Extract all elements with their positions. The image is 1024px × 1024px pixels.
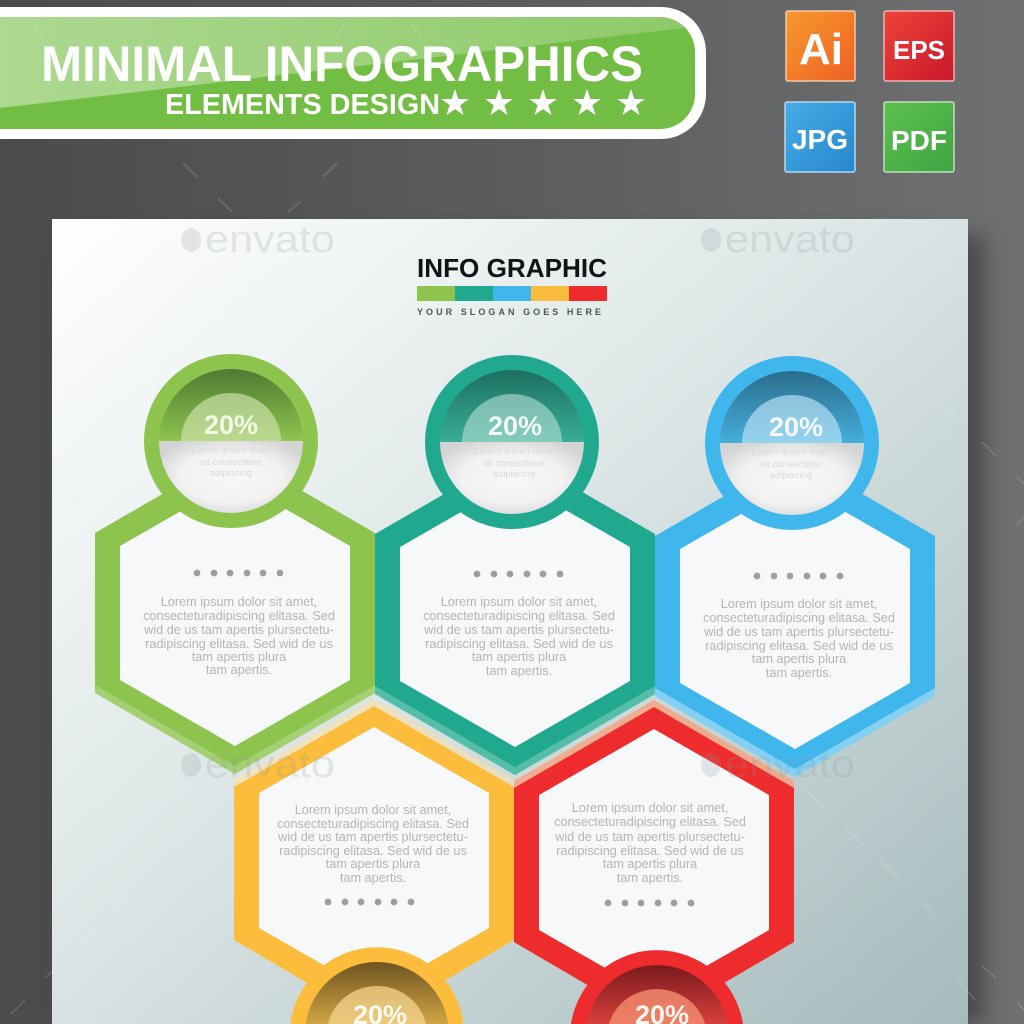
teal text: wid de us tam apertis plursectetu- bbox=[423, 623, 614, 637]
blue text: tam apertis plura bbox=[752, 652, 847, 666]
red text: radipiscing elitasa. Sed wid de us bbox=[556, 844, 744, 858]
icon: JPG format bbox=[785, 102, 855, 172]
blue text: Lorem ipsum dolor sit amet, bbox=[721, 597, 877, 611]
icon: PDF format: PDF bbox=[891, 125, 947, 156]
hexagon: red bbox=[514, 700, 794, 1024]
circle badge: yellow bbox=[291, 947, 463, 1024]
circle badge: green bbox=[144, 354, 318, 528]
hexagon: green bbox=[95, 452, 375, 774]
banner bbox=[0, 7, 706, 139]
green text: radipiscing elitasa. Sed wid de us bbox=[145, 637, 333, 651]
circle badge: green: sit consectetur bbox=[200, 457, 263, 468]
hexagon: yellow bbox=[234, 699, 514, 1022]
rating stars: ★ bbox=[527, 82, 559, 123]
yellow text: tam apertis plura bbox=[326, 857, 421, 871]
banner gloss bbox=[0, 17, 684, 108]
circle badge: blue: Lorem ipsum dolor bbox=[751, 447, 832, 458]
icon: PDF format bbox=[884, 102, 954, 172]
slogan: YOUR SLOGAN GOES HERE bbox=[417, 307, 601, 317]
icon: JPG format: JPG bbox=[792, 124, 848, 155]
banner title: MINIMAL INFOGRAPHICS bbox=[41, 36, 643, 92]
circle badge: red bbox=[571, 950, 743, 1024]
green dots bbox=[194, 570, 283, 576]
teal text: Lorem ipsum dolor sit amet, bbox=[441, 595, 597, 609]
teal text: radipiscing elitasa. Sed wid de us bbox=[425, 637, 613, 651]
banner subtitle: ELEMENTS DESIGN bbox=[165, 89, 440, 121]
teal text: tam apertis plura bbox=[472, 650, 567, 664]
yellow text: tam apertis. bbox=[340, 871, 406, 885]
icon: Ai format: Ai bbox=[799, 25, 843, 74]
circle badge: teal: sit consectetur bbox=[483, 458, 546, 469]
teal text: consecteturadipiscing elitasa. Sed bbox=[423, 609, 615, 623]
circle badge: teal: 20% bbox=[488, 411, 542, 441]
watermark: lower left: envato bbox=[205, 744, 335, 786]
circle badge: blue: sit consectetur bbox=[760, 459, 823, 470]
watermark: top right: envato bbox=[725, 219, 855, 261]
teal dots bbox=[474, 571, 563, 577]
red text: Lorem ipsum dolor sit amet, bbox=[572, 801, 728, 815]
banner white frame bbox=[0, 7, 706, 139]
circle badge: blue bbox=[705, 356, 879, 530]
circle badge: green: 20% bbox=[204, 410, 258, 440]
rating stars: ★ bbox=[615, 82, 647, 123]
circle badge: teal bbox=[425, 355, 599, 529]
yellow text: radipiscing elitasa. Sed wid de us bbox=[279, 844, 467, 858]
blue text: consecteturadipiscing elitasa. Sed bbox=[703, 611, 895, 625]
green text: wid de us tam apertis plursectetu- bbox=[143, 623, 334, 637]
panel heading bbox=[417, 253, 607, 317]
red text: tam apertis plura bbox=[603, 857, 698, 871]
green text: consecteturadipiscing elitasa. Sed bbox=[143, 609, 335, 623]
yellow dots bbox=[325, 899, 414, 905]
green text: tam apertis plura bbox=[192, 650, 287, 664]
blue dots bbox=[754, 573, 843, 579]
yellow text: consecteturadipiscing elitasa. Sed bbox=[277, 817, 469, 831]
red text: wid de us tam apertis plursectetu- bbox=[554, 830, 745, 844]
hexagon: blue bbox=[655, 455, 935, 777]
circle badge: blue: adipiscing bbox=[770, 470, 812, 481]
icon: EPS format bbox=[884, 11, 954, 81]
watermark: top left: envato bbox=[205, 219, 335, 261]
yellow text: wid de us tam apertis plursectetu- bbox=[277, 830, 468, 844]
colour bar bbox=[417, 286, 607, 301]
teal text: tam apertis. bbox=[486, 664, 552, 678]
watermark: lower right: envato bbox=[725, 744, 855, 786]
circle badge: green: adipiscing bbox=[210, 468, 252, 479]
circle badge: teal: adipiscing bbox=[493, 469, 535, 480]
blue text: wid de us tam apertis plursectetu- bbox=[703, 625, 894, 639]
icon: EPS format: EPS bbox=[893, 35, 945, 65]
yellow text: Lorem ipsum dolor sit amet, bbox=[295, 803, 451, 817]
rating stars: ★ bbox=[483, 82, 515, 123]
green text: Lorem ipsum dolor sit amet, bbox=[161, 595, 317, 609]
circle badge: blue: 20% bbox=[769, 412, 823, 442]
hexagon: teal bbox=[375, 453, 655, 775]
icon: Ai format bbox=[786, 11, 855, 81]
circle badge: teal: Lorem ipsum dolor bbox=[474, 446, 555, 457]
heading text: INFO GRAPHIC bbox=[417, 253, 607, 283]
panel shadow bbox=[60, 235, 985, 1024]
main panel bbox=[52, 219, 968, 1024]
rating stars: ★ bbox=[439, 82, 471, 123]
blue text: tam apertis. bbox=[766, 666, 832, 680]
rating stars bbox=[439, 82, 647, 123]
rating stars: ★ bbox=[571, 82, 603, 123]
circle badge: green: Lorem ipsum dolor bbox=[191, 445, 272, 456]
red text: tam apertis. bbox=[617, 871, 683, 885]
red dots bbox=[605, 900, 694, 906]
green text: tam apertis. bbox=[206, 663, 272, 677]
banner green body bbox=[0, 17, 695, 129]
blue text: radipiscing elitasa. Sed wid de us bbox=[705, 639, 893, 653]
red text: consecteturadipiscing elitasa. Sed bbox=[554, 815, 746, 829]
